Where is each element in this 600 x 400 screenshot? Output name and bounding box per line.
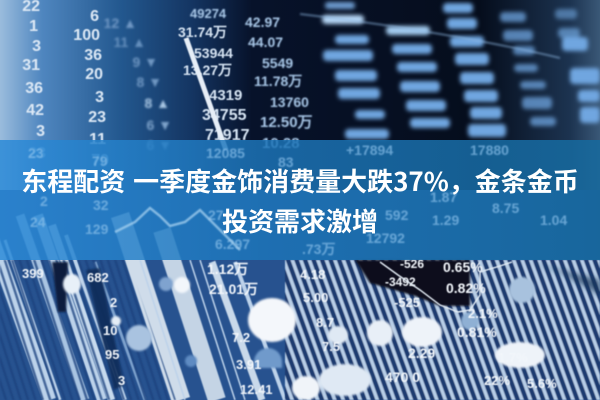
white numbers, lower area: 21.01万 xyxy=(209,281,258,297)
price column: 53944 xyxy=(194,45,233,61)
glow line across upper right xyxy=(300,14,560,58)
blurred data columns, upper right xyxy=(322,2,600,139)
numbers seen through the banner: +17894 xyxy=(346,142,393,158)
blurred second price column xyxy=(190,6,313,152)
price column: 4319 xyxy=(209,87,242,104)
rank numbers and arrows column: 8 ▲ xyxy=(144,95,170,111)
sharp number columns, upper left: 31 xyxy=(22,57,40,74)
sharp number columns, upper left: 20 xyxy=(85,66,103,83)
white numbers, lower area: 682 xyxy=(87,270,109,285)
white numbers, lower area: 0.82% xyxy=(446,280,486,296)
blurred second price column: 11.78万 xyxy=(254,73,302,89)
white numbers, lower area: 12.41 xyxy=(240,382,273,397)
numbers seen through the banner: 129 xyxy=(85,221,109,237)
numbers seen through the banner: 79 xyxy=(92,153,108,169)
white numbers, lower area: 470 0 xyxy=(385,369,420,385)
blurred second price column: 13760 xyxy=(270,94,309,110)
white numbers, lower area: 95 xyxy=(105,347,119,362)
white numbers, lower area: 7.2 xyxy=(232,330,250,345)
white numbers, lower area: -525 xyxy=(394,295,420,310)
price column xyxy=(178,24,250,144)
white numbers, lower area: -3492 xyxy=(385,275,416,289)
white numbers, lower area: 1.12万 xyxy=(207,261,248,277)
numbers seen through the banner: .73万 xyxy=(302,241,335,257)
numbers seen through the banner: 27 xyxy=(208,207,224,223)
white numbers, lower area: 8.7 xyxy=(316,315,334,330)
white numbers, lower area: 4.18 xyxy=(300,267,325,282)
white bokeh blobs xyxy=(63,274,545,400)
white numbers, lower area: 3 xyxy=(118,373,125,388)
blurred second price column: 49274 xyxy=(190,6,227,21)
dark band, upper right of lower area xyxy=(530,262,600,295)
rank numbers and arrows column: 9 ▼ xyxy=(132,54,158,70)
white numbers, lower area: 0.65% xyxy=(443,259,483,275)
sharp number columns, upper left: 3 xyxy=(36,123,45,140)
numbers seen through the banner: 23 xyxy=(28,145,44,161)
line chart, lower right xyxy=(380,262,512,312)
white diagonal pointer stroke xyxy=(186,38,226,150)
numbers seen through the banner: 83 xyxy=(278,154,294,170)
sharp number columns, upper left: 6 xyxy=(90,8,99,25)
price column: 71917 xyxy=(205,127,250,144)
numbers seen through the banner: 6.297 xyxy=(215,236,250,252)
blurred second price column: 42.97 xyxy=(245,14,280,30)
rank numbers and arrows column xyxy=(104,15,172,153)
sharp number columns, upper left: 79 xyxy=(91,152,109,169)
numbers seen through the banner: 24 xyxy=(30,214,46,230)
sharp number columns, upper left: 23 xyxy=(28,145,46,162)
dense stripes on the right xyxy=(285,260,600,400)
numbers seen through the banner: 1.87 xyxy=(430,189,457,205)
chart line seen through the banner xyxy=(115,208,240,250)
price column: 13.27万 xyxy=(183,62,232,78)
blurred second price column: 10.28 xyxy=(262,135,300,152)
title line 1: 东程配资 一季度金饰消费量大跌37%，金条金币 xyxy=(21,162,579,199)
title line 2: 投资需求激增 xyxy=(222,202,378,239)
blurred second price column: 12.50万 xyxy=(260,114,313,131)
white numbers, lower area: 2.29 xyxy=(408,345,435,361)
sharp number columns, upper left: 42 xyxy=(26,102,44,119)
rank numbers and arrows column: 12 ▲ xyxy=(104,15,137,31)
blurred second price column: 44.07 xyxy=(248,34,283,50)
white numbers, lower area: 0.81% xyxy=(457,324,497,340)
rank numbers and arrows column: 11 ▲ xyxy=(113,34,146,50)
numbers seen through the banner: 12085 xyxy=(206,145,245,161)
white numbers, lower area: -526 xyxy=(400,257,424,271)
sharp number columns, upper left: 3 xyxy=(32,38,41,55)
sharp number columns, upper left: 36 xyxy=(84,47,102,64)
numbers seen through the banner: 592 xyxy=(385,207,409,223)
fine dark rules over the left stripes xyxy=(0,260,176,400)
white numbers, lower area xyxy=(22,257,557,397)
white numbers, lower area: 2.1% xyxy=(468,306,498,321)
numbers seen through the banner: 8.75 xyxy=(492,200,519,216)
banner: translucent blue band xyxy=(0,140,600,260)
numbers seen through the banner: 32 xyxy=(93,197,109,213)
blurred second price column: 5549 xyxy=(262,55,293,71)
price column: 34755 xyxy=(202,107,247,124)
white numbers, lower area: 399 xyxy=(22,266,44,281)
white numbers, lower area: 7.5 xyxy=(322,339,340,354)
white numbers, lower area: 3.91 xyxy=(236,357,261,372)
striped lower chart xyxy=(0,190,600,400)
numbers seen through the banner: 17880 xyxy=(470,142,509,158)
sharp number columns, upper left: 11 xyxy=(89,131,106,148)
numbers seen through the banner: 1.29 xyxy=(432,212,459,228)
sharp number columns, upper left: 23 xyxy=(88,109,106,126)
sharp number columns, upper left xyxy=(22,0,109,169)
numbers seen through the banner: 2 xyxy=(40,193,48,209)
numbers seen through the banner: 12792 xyxy=(366,230,405,246)
sharp number columns, upper left: 1 xyxy=(29,18,38,35)
white numbers, lower area: 1.7% xyxy=(498,350,528,365)
rank numbers and arrows column: 6 ▼ xyxy=(146,137,172,153)
sharp number columns, upper left: 3 xyxy=(95,89,104,106)
white numbers, lower area: 5.00 xyxy=(303,290,328,305)
numbers seen through the banner xyxy=(28,142,567,257)
sharp number columns, upper left: 100 xyxy=(73,27,100,44)
white numbers, lower area: 10 xyxy=(103,323,117,338)
white numbers, lower area: 2 xyxy=(110,295,117,310)
white numbers, lower area: 5.6% xyxy=(527,376,557,391)
sharp number columns, upper left: 36 xyxy=(25,80,43,97)
price column: 31.74万 xyxy=(178,24,227,40)
rank numbers and arrows column: 8 ▼ xyxy=(136,74,162,90)
rank numbers and arrows column: 6 ▼ xyxy=(146,117,172,133)
numbers seen through the banner: 1.04 xyxy=(540,212,567,228)
white numbers, lower area: 22% xyxy=(484,373,510,388)
